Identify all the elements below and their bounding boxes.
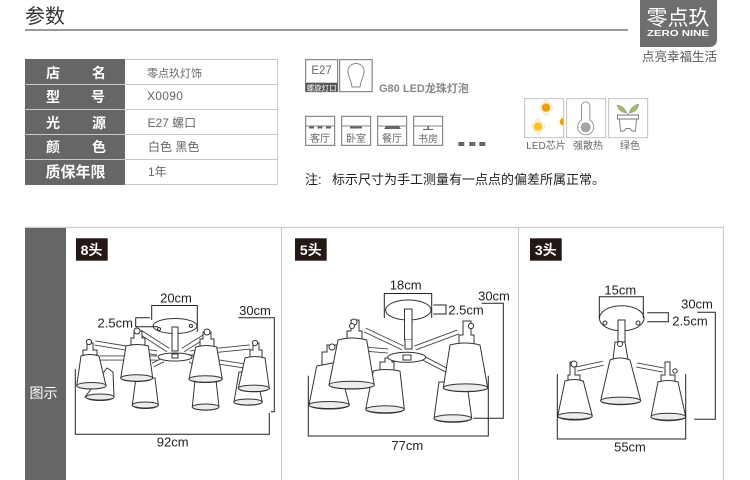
dimension: 15cm: 15cm [604, 282, 636, 297]
dimension: 30cm [238, 303, 274, 412]
row: light source: E27 螺口 [148, 116, 196, 130]
more rooms ellipsis [458, 142, 485, 146]
row: colour: 白色 黑色 [148, 139, 199, 154]
row: model: 号 [91, 89, 105, 105]
dimension: 55cm [557, 374, 686, 455]
lamp drawing: 5 heads [309, 300, 488, 422]
dimension: 30cm: 30cm [478, 289, 510, 304]
dimension: 2.5cm: 2.5cm [448, 302, 484, 317]
dimension: 30cm: 30cm [681, 297, 713, 312]
lamp drawing: 8 heads [77, 318, 269, 410]
parameter table [25, 59, 278, 185]
row: colour: 色 [92, 139, 106, 155]
row: colour [46, 139, 199, 155]
dimension: 92cm [75, 369, 269, 450]
icon: bedroom [342, 116, 371, 145]
icon: living room: 客厅 [310, 132, 330, 145]
dimension: 18cm [384, 277, 432, 318]
dimension: 20cm [152, 291, 197, 332]
panel: 5 heads [295, 238, 510, 453]
row: light source [46, 115, 196, 131]
side label: diagram: 图示 [30, 385, 58, 401]
dimension: 55cm: 55cm [614, 440, 646, 455]
icon: dining room [378, 116, 407, 145]
icon: E27 screw socket: 螺旋灯口 [307, 82, 337, 92]
bulb label: G80 LED龙珠灯泡 [379, 81, 469, 95]
dimension: 30cm [473, 289, 510, 418]
dimension: 2.5cm: 2.5cm [98, 316, 133, 331]
row: warranty [46, 163, 167, 181]
badge: 8头: 8头 [81, 242, 102, 258]
icon: study [414, 116, 443, 146]
dimension: 18cm: 18cm [390, 277, 422, 292]
icon: LED chips [525, 99, 564, 138]
row: model: X0090 [147, 89, 183, 103]
icon: E27 screw socket [306, 60, 338, 92]
note: 注: [305, 172, 322, 187]
row: warranty: 质保年限 [46, 163, 106, 181]
dimension: 20cm: 20cm [160, 291, 192, 306]
LED label: LED芯片 [526, 139, 566, 152]
panel: 3 heads [530, 238, 715, 455]
dimension: 92cm: 92cm [157, 435, 189, 450]
dimension: 2.5cm [647, 313, 708, 329]
icon: bulb [340, 60, 372, 92]
row: warranty: 1年 [148, 165, 167, 179]
badge: 3头: 3头 [535, 242, 557, 258]
dimension: 2.5cm: 2.5cm [672, 314, 708, 329]
icon: study: 书房 [418, 132, 438, 146]
row: light source: 源 [92, 115, 106, 131]
row: model [46, 89, 183, 105]
dimension: 30cm: 30cm [239, 303, 271, 318]
row: colour: 颜 [46, 139, 60, 155]
row: shop name: 店 [46, 65, 60, 81]
dimension: 77cm: 77cm [391, 438, 423, 453]
row: shop name [46, 65, 202, 81]
icon: potted plant [609, 99, 648, 138]
row: light source: 光 [46, 115, 60, 131]
heading: parameters: 参数 [25, 5, 65, 28]
icon: dining room: 餐厅 [382, 132, 402, 145]
diagram frame lines [25, 228, 724, 480]
brand logo: 点亮幸福生活 [642, 49, 717, 64]
brand logo: ZERO NINE [647, 29, 710, 38]
badge: 8头 [76, 238, 108, 261]
dimension: 30cm [681, 297, 715, 419]
row: shop name: 零点玖灯饰 [147, 66, 202, 80]
dimension: 2.5cm [98, 316, 158, 331]
badge: 5头: 5头 [300, 242, 322, 258]
brand logo: 零点玖 [646, 7, 710, 30]
green label: 绿色 [620, 139, 640, 152]
badge: 5头 [295, 238, 327, 261]
row: shop name: 名 [92, 65, 106, 81]
icon: thermometer [567, 99, 606, 138]
badge: 3头 [530, 238, 562, 261]
dimension: 15cm [599, 282, 643, 318]
heat label: 强散热 [573, 139, 603, 152]
row: model: 型 [46, 89, 60, 105]
dimension: 77cm [308, 376, 488, 453]
icon: E27 screw socket: E27 [311, 65, 332, 77]
panel: 8 heads [75, 238, 274, 450]
note: 标示尺寸为手工测量有一点点的偏差所属正常。 [332, 172, 605, 187]
brand logo [640, 0, 717, 64]
icon: living room [306, 116, 335, 145]
side label: diagram [25, 228, 66, 480]
lamp drawing: 3 heads [558, 306, 686, 421]
icon: bedroom: 卧室 [346, 132, 366, 145]
